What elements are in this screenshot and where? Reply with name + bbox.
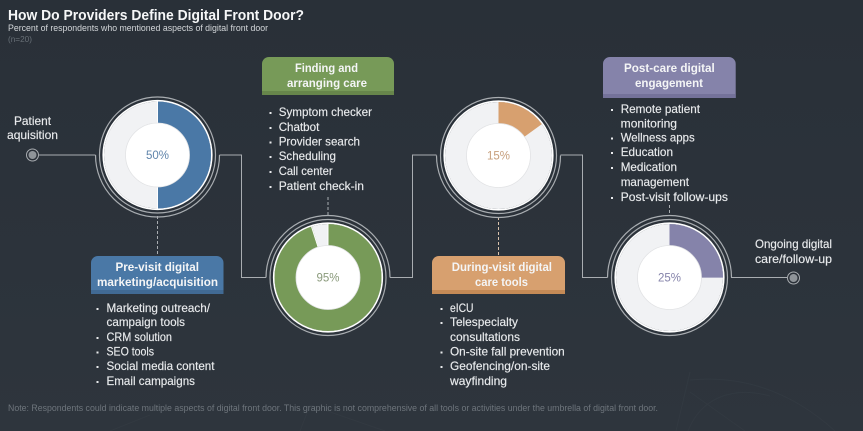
start label: patient aquisition: Patient [14, 114, 52, 128]
list: finding and arranging care: Call center [279, 164, 333, 178]
end label: ongoing digital care: Ongoing digital [755, 237, 832, 251]
panel: during-visit digital care tools: care tools [475, 275, 528, 289]
list: during-visit digital care tools: consultations [450, 330, 520, 344]
donut: post-care 25% [608, 215, 732, 336]
list: during-visit digital care tools [440, 301, 565, 388]
icon: end node [788, 272, 800, 284]
list: pre-visit digital marketing: CRM solution [106, 330, 172, 344]
list: during-visit digital care tools: On-site fall prevention [450, 344, 565, 358]
list: pre-visit digital marketing: Social media content [106, 359, 215, 373]
list: post-care digital engagement: Post-visit follow-ups [621, 190, 728, 204]
list: finding and arranging care: Symptom checker [279, 105, 372, 119]
donut: finding and arranging care 95%: 95% [316, 272, 340, 284]
panel: finding and arranging care: arranging care [287, 76, 367, 90]
donut: pre-visit 50% [96, 97, 220, 217]
footnote: Note: Respondents could indicate multiple aspects of digital front door. This graphic is not comprehensive of all tools or activities under the umbrella of digital front door. [8, 403, 658, 413]
list: post-care digital engagement [611, 102, 728, 204]
list: during-visit digital care tools: Geofencing/on-site [450, 359, 550, 373]
panel: finding and arranging care: Finding and [295, 61, 358, 75]
list: during-visit digital care tools: Telespecialty [450, 315, 518, 329]
end label: ongoing digital care: care/follow-up [755, 252, 832, 266]
list: finding and arranging care: Chatbot [279, 120, 320, 134]
panel: post-care digital engagement [603, 57, 736, 98]
list: finding and arranging care [270, 105, 372, 193]
panel: pre-visit digital marketing: marketing/acquisition [97, 275, 218, 289]
list: pre-visit digital marketing [96, 301, 215, 388]
list: during-visit digital care tools: wayfinding [449, 374, 507, 388]
list: pre-visit digital marketing: Marketing outreach/ [106, 301, 211, 315]
list: post-care digital engagement: Education [621, 145, 673, 159]
panel: pre-visit digital marketing: Pre-visit digital [116, 260, 199, 274]
panel: finding and arranging care [262, 57, 394, 95]
list: post-care digital engagement: monitoring [621, 116, 677, 130]
panel: during-visit digital care tools [432, 256, 565, 294]
list: post-care digital engagement: management [621, 175, 690, 189]
sample size: (n=20) [8, 34, 32, 44]
list: post-care digital engagement: Remote patient [621, 102, 701, 116]
list: finding and arranging care: Patient check-in [279, 179, 364, 193]
donut: post-care 25%: 25% [658, 272, 681, 284]
panel: during-visit digital care tools: During-visit digital [452, 260, 552, 274]
end label: ongoing digital care [755, 237, 832, 266]
list: post-care digital engagement: Medication [621, 160, 677, 174]
list: post-care digital engagement: Wellness apps [621, 131, 695, 145]
start label: patient aquisition: aquisition [7, 128, 58, 142]
donut: finding and arranging care 95% [266, 215, 390, 336]
connector lines [39, 155, 787, 278]
donut: during-visit 15%: 15% [487, 150, 510, 162]
list: finding and arranging care: Provider search [279, 134, 360, 148]
subtitle: Percent of respondents who mentioned aspects of digital front door [8, 23, 268, 33]
list: pre-visit digital marketing: campaign tools [106, 315, 185, 329]
list: pre-visit digital marketing: SEO tools [106, 344, 154, 358]
list: during-visit digital care tools: eICU [450, 301, 474, 315]
start label: patient aquisition [7, 114, 58, 142]
list: finding and arranging care: Scheduling [279, 149, 336, 163]
list: pre-visit digital marketing: Email campaigns [106, 374, 195, 388]
panel: pre-visit digital marketing [91, 256, 224, 294]
title: How Do Providers Define Digital Front Door? [8, 7, 304, 24]
panel: post-care digital engagement: engagement [635, 76, 703, 90]
icon: start node [26, 149, 38, 161]
donut: during-visit 15% [436, 98, 560, 218]
panel: post-care digital engagement: Post-care digital [624, 61, 715, 75]
donut: pre-visit 50%: 50% [146, 150, 169, 162]
